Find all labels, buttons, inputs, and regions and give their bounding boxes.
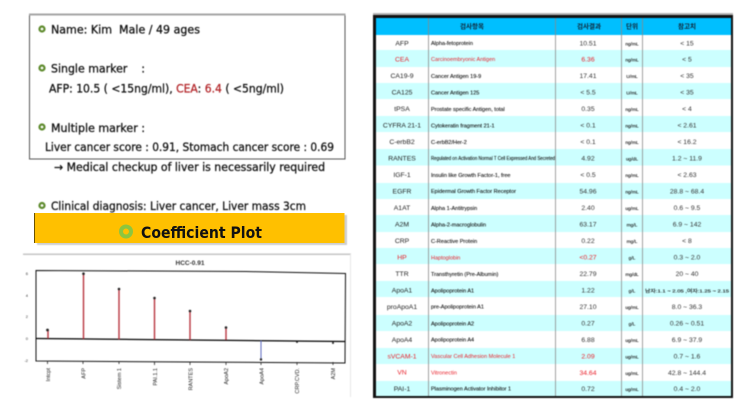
chart title: HCC-0.91: [176, 260, 205, 267]
y axis labels: 4: [26, 293, 29, 298]
row: CEA: 6.36: [581, 56, 595, 64]
row: RANTES: ug/dL: [626, 156, 638, 162]
multiple marker scores: Liver cancer score : 0.91, Stomach cancer score : 0.69: [45, 140, 334, 154]
row: EGFR: Epidermal Growth Factor Receptor: [431, 189, 516, 195]
x axis tick labels: ApoA2: [224, 368, 230, 385]
row: AFP: < 15: [680, 40, 694, 48]
panel: patient summary: [29, 14, 346, 159]
row: sVCAM-1: sVCAM-1: [387, 354, 417, 360]
row: C-erbB2: ng/mL: [625, 140, 639, 146]
y axis labels: 2: [26, 314, 29, 319]
row: RANTES: 4.92: [581, 156, 595, 162]
row: sVCAM-1: ug/mL: [625, 354, 639, 360]
row: CA19-9: CA19-9: [390, 73, 414, 80]
row: EGFR: EGFR: [393, 188, 412, 196]
row: RANTES: Regulated on Activation Normal T Cell Expressed And Secreted: [431, 156, 555, 162]
row: RANTES: 1.2 ~ 11.9: [672, 156, 702, 162]
x axis tick labels: Sistem 1: [117, 368, 123, 389]
single marker values: AFP: 10.5 ( <15ng/ml), CEA: 6.4 ( <5ng/ml): [49, 82, 284, 96]
row: A2M: 63.17: [579, 222, 597, 228]
alternating row shading: [376, 50, 731, 396]
row: CEA: [395, 56, 692, 64]
row: RANTES: [388, 156, 702, 162]
icon: green bullet: [121, 226, 131, 236]
row: AFP: AFP: [395, 40, 409, 48]
row: tPSA: [394, 106, 692, 113]
x axis tick labels: Intcpt: [46, 368, 52, 381]
row: CYFRA 21-1: [383, 122, 697, 130]
clinical diagnosis: Clinical diagnosis: Liver cancer, Liver mass 3cm: [51, 199, 306, 213]
row: A2M: [395, 222, 701, 228]
row: AFP: 10.51: [579, 40, 597, 48]
row: A1AT: A1AT: [394, 205, 410, 212]
y axis labels: 6: [26, 271, 29, 276]
row: CA19-9: < 35: [680, 73, 694, 80]
row: CRP: CRP: [395, 238, 410, 245]
row: CYFRA 21-1: < 2.61: [677, 122, 697, 130]
row: ApoA1: 1.22: [581, 288, 595, 294]
x axis tick labels: [46, 368, 337, 394]
row: A1AT: 0.6 ~ 9.5: [674, 205, 701, 212]
row: ApoA4: [392, 337, 702, 344]
row: ApoA2: 0.26 ~ 0.51: [670, 320, 704, 328]
row: C-erbB2: C-erbB2: [389, 139, 415, 146]
row: ApoA2: [392, 320, 704, 328]
row: tPSA: ng/mL: [625, 107, 639, 113]
row: sVCAM-1: [387, 354, 701, 360]
row: A2M: mg/L: [627, 222, 638, 228]
row: CA19-9: 17.41: [579, 73, 597, 80]
row: ApoA1: g/L: [629, 288, 636, 294]
row: IGF-1: ng/mL: [625, 173, 639, 179]
row: CYFRA 21-1: ng/mL: [625, 124, 639, 130]
row: A1AT: [394, 205, 701, 212]
row: CRP: mg/L: [627, 239, 638, 245]
row: sVCAM-1: 2.09: [581, 354, 595, 360]
row: CA125: U/mL: [626, 90, 638, 96]
table header row: 검사항목: [460, 22, 484, 30]
row: ApoA2: Apolipoprotein A2: [431, 322, 474, 328]
row: A1AT: Alpha 1-Antitrypsin: [431, 206, 477, 212]
row: A2M: 6.9 ~ 142: [673, 222, 701, 228]
row: ApoA2: 0.27: [581, 320, 595, 328]
row: TTR: [395, 271, 699, 278]
y axis labels: 0: [26, 336, 29, 341]
row: proApoA1: [387, 304, 702, 311]
row: CRP: 0.22: [581, 238, 595, 245]
row: HP: 0.3 ~ 2.0: [674, 254, 701, 262]
positive coefficient stems: [46, 272, 227, 340]
row: C-erbB2: [389, 139, 697, 146]
recommendation text: → Medical checkup of liver is necessarily required: [54, 160, 325, 174]
row: CRP: [395, 238, 692, 245]
row: AFP: [395, 40, 694, 48]
row: C-erbB2: < 16.2: [677, 139, 697, 146]
row: HP: HP: [397, 254, 407, 262]
table header row: 단위: [626, 22, 638, 30]
row: tPSA: Prostate specific Antigen, total: [431, 107, 505, 113]
row: CEA: ng/mL: [625, 58, 639, 64]
row: ApoA1: ApoA1: [392, 288, 412, 294]
row: HP: g/L: [629, 256, 636, 262]
row: A1AT: 2.40: [581, 205, 595, 212]
y axis labels: [24, 271, 29, 363]
row: proApoA1: 27.10: [579, 304, 597, 311]
row: ApoA4: Apolipoprotein A4: [431, 338, 474, 344]
row: VN: ug/mL: [625, 371, 639, 377]
row: TTR: Transthyretin (Pre-Albumin): [431, 272, 499, 278]
row: CA125: [392, 90, 694, 96]
x axis tick labels: PAI.1.1: [153, 368, 159, 386]
row: tPSA: < 4: [682, 106, 692, 113]
row: EGFR: ng/mL: [625, 190, 639, 196]
x axis tick labels: CRP.CVD.: [295, 368, 301, 394]
row: CA125: < 35: [680, 90, 694, 96]
coefficient plot banner: [34, 213, 347, 245]
row: ApoA1: Apolipoprotein A1: [431, 288, 474, 294]
row: CA125: Cancer Antigen 125: [431, 90, 479, 96]
row: IGF-1: [393, 172, 697, 179]
row: PAI-1: ug/mL: [625, 387, 639, 393]
row: proApoA1: 8.0 ~ 36.3: [672, 304, 702, 311]
row: sVCAM-1: Vascular Cell Adhesion Molecule 1: [431, 354, 515, 360]
row: AFP: ng/mL: [625, 42, 639, 48]
row: EGFR: 54.96: [579, 188, 597, 196]
table header row: [376, 18, 731, 35]
row: proApoA1: proApoA1: [387, 304, 417, 311]
row: proApoA1: ug/mL: [625, 305, 639, 311]
row: PAI-1: 0.72: [581, 386, 595, 393]
chart: coefficient stem plot: [23, 254, 351, 397]
row: CEA: CEA: [395, 56, 409, 64]
row: PAI-1: [394, 386, 701, 393]
x axis ticks: [48, 361, 333, 365]
row: VN: [397, 370, 706, 377]
x axis tick labels: RANTES: [188, 368, 194, 390]
row: VN: VN: [397, 370, 407, 376]
row: EGFR: [393, 188, 704, 196]
row: TTR: 20 ~ 40: [676, 271, 699, 278]
row: sVCAM-1: 0.7 ~ 1.6: [674, 354, 701, 360]
row: ApoA1: [392, 288, 729, 294]
row: CEA: < 5: [682, 56, 692, 64]
row: HP: <0.27: [579, 254, 597, 262]
x axis tick labels: AFP: [82, 368, 88, 379]
row: IGF-1: Insulin like Growth Factor-1, free: [431, 173, 510, 179]
row: EGFR: 28.8 ~ 68.4: [670, 188, 704, 196]
x axis tick labels: A2M: [331, 368, 337, 379]
row: tPSA: 0.35: [581, 106, 595, 113]
row: TTR: 22.79: [579, 271, 597, 278]
table header row: 검사결과: [577, 22, 601, 30]
row: VN: 42.8 ~ 144.4: [668, 370, 706, 377]
row: HP: Haptoglobin: [431, 256, 460, 262]
row: CYFRA 21-1: < 0.1: [580, 122, 596, 130]
panel: test results table: [373, 13, 733, 398]
row: CYFRA 21-1: CYFRA 21-1: [383, 122, 421, 130]
x axis tick labels: ApoA4: [260, 368, 266, 385]
row: C-erbB2: C-erbB2/Her-2: [431, 140, 467, 146]
table header row: 참고치: [678, 22, 696, 30]
row: A1AT: ug/mL: [625, 206, 639, 212]
row: A2M: A2M: [395, 222, 409, 228]
negative coefficient stems: [260, 340, 334, 361]
row: CYFRA 21-1: Cytokeratin fragment 21-1: [431, 124, 495, 130]
banner title: Coefficient Plot: [141, 223, 262, 242]
row: ApoA2: g/L: [629, 322, 636, 328]
row: CRP: C-Reactive Protein: [431, 239, 477, 245]
row: CA19-9: Cancer Antigen 19-9: [431, 74, 481, 80]
row: ApoA4: ug/mL: [625, 338, 639, 344]
row: IGF-1: IGF-1: [393, 172, 411, 179]
row: VN: Vitronectin: [431, 370, 457, 376]
row: TTR: TTR: [395, 271, 409, 278]
row: IGF-1: < 0.5: [580, 172, 596, 179]
single marker heading: Single marker :: [51, 62, 145, 76]
row: ApoA4: 6.9 ~ 37.9: [672, 337, 702, 344]
row: ApoA4: 6.88: [581, 337, 595, 344]
row: RANTES: RANTES: [388, 156, 416, 162]
row: ApoA2: ApoA2: [392, 320, 412, 328]
row: PAI-1: 0.4 ~ 2.0: [674, 386, 701, 393]
row: AFP: Alpha-fetoprotein: [431, 41, 473, 47]
row: CA125: < 5.5: [580, 90, 596, 96]
row: CA125: CA125: [392, 90, 413, 96]
row: IGF-1: < 2.63: [677, 172, 697, 179]
row: CEA: Carcinoembryonic Antigen: [431, 57, 495, 63]
row: VN: 34.64: [579, 370, 597, 377]
multiple marker heading: Multiple marker :: [51, 121, 145, 135]
patient name line: Name: Kim Male / 49 ages: [51, 22, 200, 36]
row: TTR: mg/dL: [625, 272, 639, 278]
y axis labels: -2: [24, 358, 29, 363]
row: HP: [397, 254, 701, 262]
row: tPSA: tPSA: [394, 106, 410, 113]
row: CA19-9: [390, 73, 694, 80]
column dividers: [428, 18, 642, 396]
row: CA19-9: U/mL: [626, 74, 638, 80]
row: proApoA1: pre-Apolipoprotein A1: [431, 304, 484, 310]
row: PAI-1: Plasminogen Activator Inhibitor 1: [431, 386, 511, 392]
row: PAI-1: PAI-1: [394, 386, 410, 393]
row: CRP: < 8: [682, 238, 692, 245]
row: A2M: Alpha-2-macroglobulin: [431, 222, 486, 228]
row: ApoA4: ApoA4: [392, 337, 412, 344]
row: ApoA1: 남자:1.1 ~ 2.05 ,여자:1.25 ~ 2.15: [645, 288, 729, 294]
row: C-erbB2: < 0.1: [580, 139, 596, 146]
